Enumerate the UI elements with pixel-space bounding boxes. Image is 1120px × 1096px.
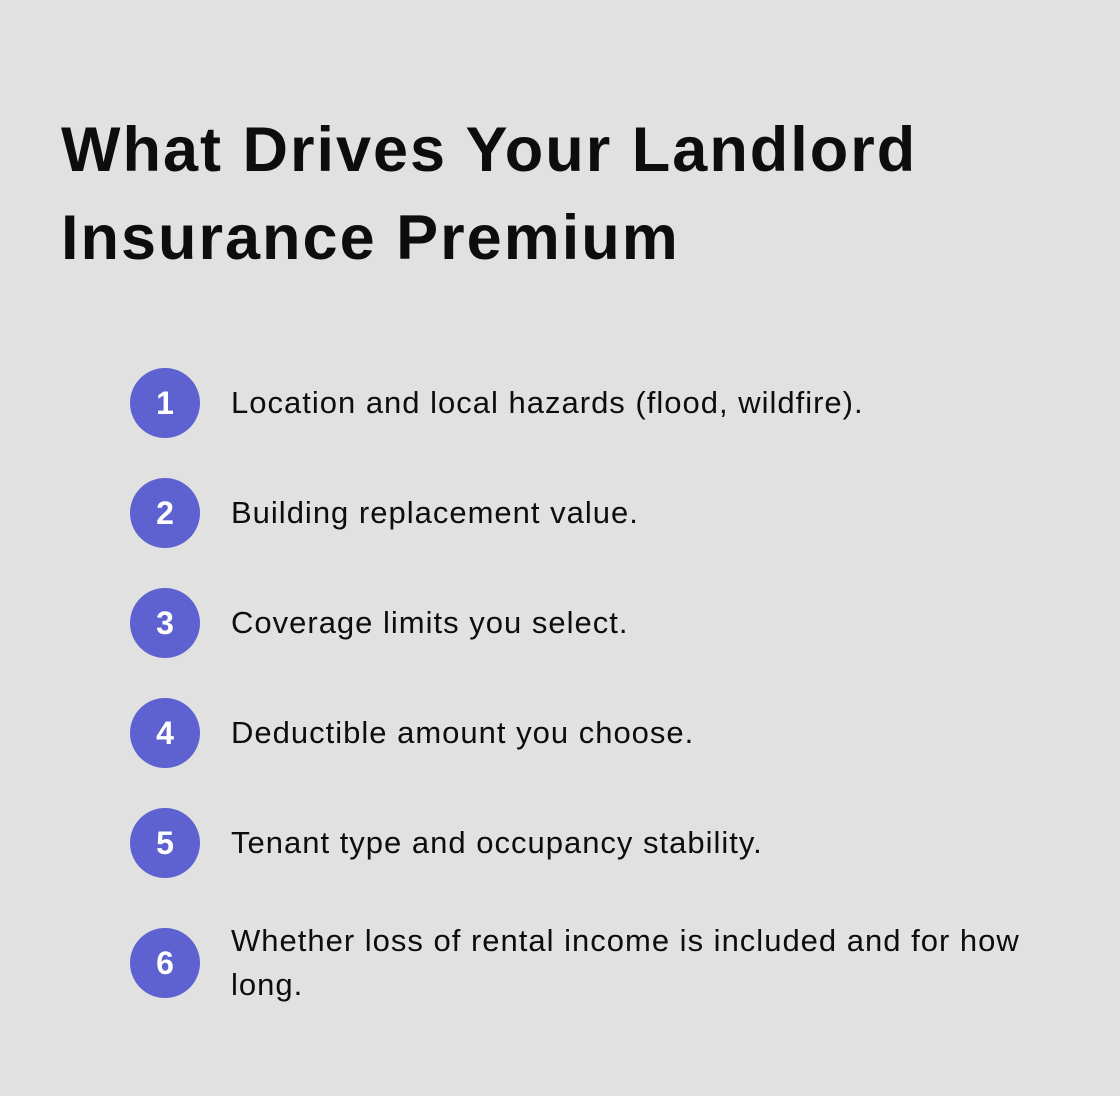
icon: number 1: 1 (156, 385, 174, 421)
icon: number 5: 5 (156, 825, 174, 861)
title: Insurance Premium (61, 203, 680, 273)
icon: number 5 (130, 808, 200, 878)
icon: number 4 (130, 698, 200, 768)
text 6 (231, 923, 1020, 1002)
icon: number 1 (130, 368, 200, 438)
icon: number 2: 2 (156, 495, 174, 531)
icon: number 4: 4 (156, 715, 174, 751)
list item 5 (130, 808, 763, 878)
text 2: Building replacement value. (231, 495, 639, 530)
text 6: Whether loss of rental income is included and for how (231, 923, 1020, 958)
text 1: Location and local hazards (flood, wildfire). (231, 385, 864, 420)
list item 1 (130, 368, 864, 438)
icon: number 3 (130, 588, 200, 658)
list item 3 (130, 588, 628, 658)
icon: number 6: 6 (156, 945, 174, 981)
text 5: Tenant type and occupancy stability. (231, 825, 763, 860)
text 6: long. (231, 967, 303, 1002)
icon: number 6 (130, 928, 200, 998)
icon: number 3: 3 (156, 605, 174, 641)
title (61, 115, 917, 273)
text 3: Coverage limits you select. (231, 605, 628, 640)
icon: number 2 (130, 478, 200, 548)
text 4: Deductible amount you choose. (231, 715, 694, 750)
list item 2 (130, 478, 639, 548)
title: What Drives Your Landlord (61, 115, 917, 185)
list item 4 (130, 698, 694, 768)
list item 6 (130, 923, 1020, 1002)
